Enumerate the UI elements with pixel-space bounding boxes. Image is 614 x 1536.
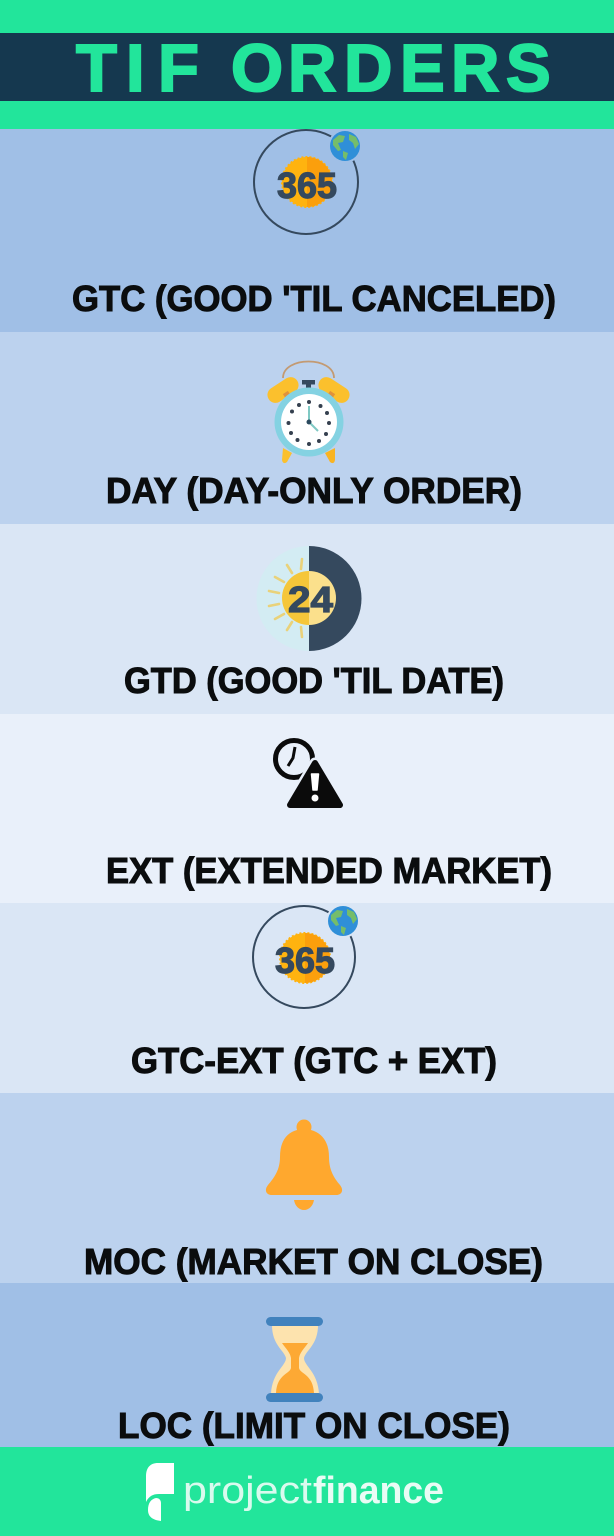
logo wordmark: project [183, 1470, 312, 1512]
panel: GTD [0, 524, 614, 714]
label: LOC: LOC (LIMIT ON CLOSE) [118, 1405, 510, 1446]
panel: DAY [0, 332, 614, 524]
panel: GTC-EXT [0, 903, 614, 1093]
label: GTC-EXT: GTC-EXT (GTC + EXT) [131, 1040, 497, 1081]
icon: alarm clock [264, 362, 353, 463]
label: DAY: DAY (DAY-ONLY ORDER) [106, 470, 522, 511]
logo wordmark [183, 1470, 444, 1512]
icon: bell [266, 1120, 342, 1210]
panel: GTC [0, 129, 614, 332]
icon: clock warning [276, 740, 340, 805]
icon: 24 hours: 24 [288, 579, 333, 620]
label: EXT: EXT (EXTENDED MARKET) [106, 850, 552, 891]
icon: 365 globe [254, 129, 362, 234]
icon: 365 globe: 365 [277, 165, 337, 206]
title: TIF ORDERS [76, 31, 551, 106]
header band [0, 0, 614, 129]
icon: 365 globe: 365 [275, 940, 335, 981]
label: MOC: MOC (MARKET ON CLOSE) [84, 1241, 543, 1282]
label: GTD: GTD (GOOD 'TIL DATE) [124, 660, 504, 701]
logo wordmark: finance [313, 1470, 444, 1512]
label: GTC: GTC (GOOD 'TIL CANCELED) [72, 278, 556, 319]
panel: EXT [0, 714, 614, 903]
icon: 365 globe [253, 904, 360, 1008]
icon: hourglass [266, 1317, 323, 1402]
icon: 24 hours [256, 546, 362, 651]
footer band [0, 1447, 614, 1536]
icon: logo mark [146, 1463, 174, 1521]
panel: LOC [0, 1283, 614, 1447]
panel: MOC [0, 1093, 614, 1283]
